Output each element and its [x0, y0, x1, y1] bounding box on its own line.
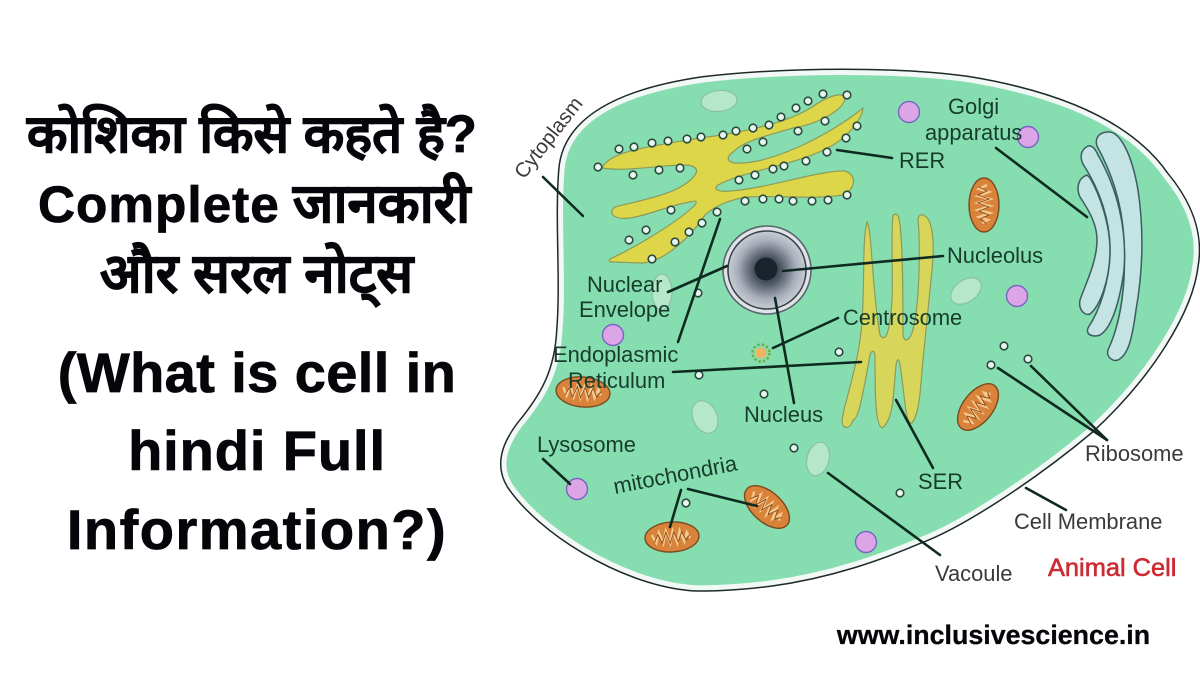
centrosome: [752, 344, 770, 362]
lysosomes: [566, 102, 1038, 552]
organelle labels: RER: [899, 148, 945, 173]
organelle labels: Reticulum: [568, 368, 665, 393]
title: Hindi heading: Complete: [38, 176, 280, 233]
organelle labels: Golgi: [948, 94, 999, 119]
smooth endoplasmic reticulum: [842, 214, 933, 428]
title: Hindi heading: कोशिका किसे कहते है?: [26, 103, 477, 164]
organelle labels: Lysosome: [537, 432, 636, 457]
organelle labels: SER: [918, 469, 963, 494]
organelle labels: Nucleus: [744, 402, 823, 427]
organelle labels: Envelope: [579, 297, 670, 322]
leader lines: [543, 148, 1107, 555]
organelle labels: Ribosome: [1085, 441, 1184, 466]
caption: Animal Cell: Animal Cell: [1048, 554, 1176, 582]
title: Hindi heading: [26, 103, 477, 308]
subtitle: English heading: Information?): [67, 498, 447, 561]
organelle labels: apparatus: [925, 120, 1022, 145]
nucleus: [723, 226, 811, 314]
title: Hindi heading: जानकारी: [292, 172, 472, 234]
organelle labels: mitochondria: [611, 450, 740, 499]
organelle labels: Nuclear: [587, 272, 662, 297]
golgi apparatus: [1078, 132, 1142, 360]
animal cell diagram: [504, 72, 1196, 588]
cell membrane and cytoplasm: [504, 72, 1196, 588]
organelle labels: Endoplasmic: [553, 342, 678, 367]
vacuoles: [652, 89, 986, 478]
organelle labels: Cytoplasm: [510, 93, 588, 183]
subtitle: English heading: [58, 341, 456, 561]
organelle labels: Cell Membrane: [1014, 509, 1162, 534]
nucleolus: [754, 258, 778, 280]
subtitle: English heading: (What is cell in: [58, 341, 456, 404]
website url: www.inclusivescience.in: [836, 620, 1150, 650]
title: Hindi heading: और सरल नोट्स: [100, 242, 415, 308]
rough endoplasmic reticulum: [602, 95, 863, 263]
organelle labels: Nucleolus: [947, 243, 1043, 268]
organelle labels: Centrosome: [843, 305, 962, 330]
ribosomes: [594, 90, 1032, 507]
organelle labels: [510, 93, 1184, 586]
mitochondria: [555, 178, 1006, 553]
subtitle: English heading: hindi Full: [128, 419, 386, 482]
organelle labels: Vacoule: [935, 561, 1012, 586]
